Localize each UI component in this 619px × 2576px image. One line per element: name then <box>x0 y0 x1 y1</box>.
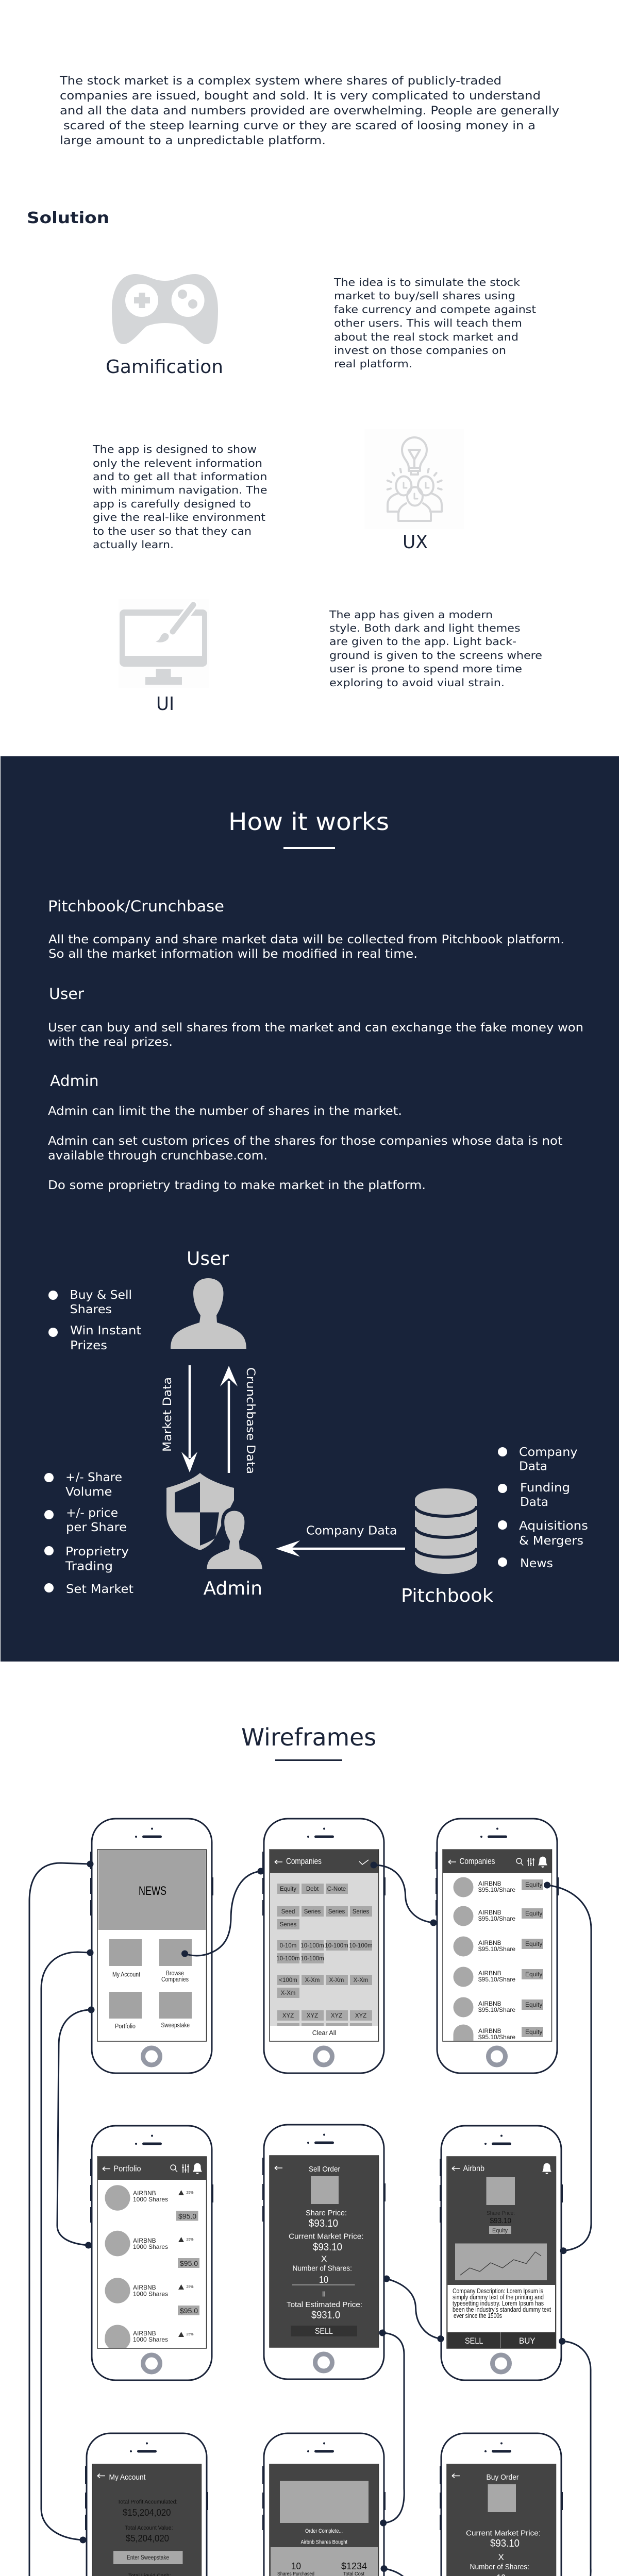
label: UI: UI <box>156 693 174 715</box>
list: pitchbook data: News <box>520 1557 553 1570</box>
list: admin capabilities <box>44 1471 133 1596</box>
text: User: User <box>49 985 84 1003</box>
wireframe: company filters: XYZ <box>331 2013 342 2019</box>
wireframe: company filters: 10-100m <box>325 1943 348 1949</box>
wireframe: home: Browse <box>166 1969 184 1977</box>
text: UX description: actually learn. <box>93 538 174 551</box>
list: admin capabilities: Volume <box>65 1485 112 1499</box>
text: UI description: user is prone to spend more time <box>329 663 522 675</box>
wireframe: companies list: Equity <box>525 1910 542 1917</box>
text: gamification description: market to buy/sell shares using <box>334 290 515 302</box>
panel: how it works <box>1 756 619 1662</box>
wireframe: portfolio: 25% <box>187 2333 194 2336</box>
text: UI description <box>329 608 542 689</box>
wireframe: company filters: X-Xm <box>329 1977 344 1984</box>
wireframe: company filters: X-Xm <box>354 1977 368 1984</box>
text: Admin: Admin can limit the the number of shares in the market. <box>48 1105 402 1118</box>
wireframe: portfolio: $95.0 <box>180 2259 198 2267</box>
wireframe: companies list: AIRBNB <box>478 1970 501 1977</box>
wireframe: companies list: AIRBNB <box>478 1909 501 1916</box>
wireframe: sell order: Share Price: <box>306 2209 347 2217</box>
wireframe: companies list: Equity <box>525 1971 542 1978</box>
wireframe: company filters: <100m <box>279 1977 297 1984</box>
wireframe: buy order: Current Market Price: <box>466 2529 541 2538</box>
wireframe: my account: $15,204,020 <box>123 2507 171 2518</box>
text: Admin: Admin can set custom prices of the shares for those companies whose data is not <box>48 1134 563 1148</box>
wireframe: company detail: typesetting industry. Lorem Ipsum has <box>453 2300 544 2307</box>
label: Crunchbase Data: Crunchbase Data <box>244 1367 257 1474</box>
wireframe: company filters: 10-100m <box>276 1956 300 1962</box>
text: UX description: only the relevent information <box>93 457 262 469</box>
wireframe: company filters: C-Note <box>327 1886 346 1892</box>
wireframe: home: Sweepstake <box>161 2021 190 2029</box>
wireframe: home: My Account <box>112 1970 140 1978</box>
label: UX: UX <box>403 532 428 553</box>
text: gamification description: real platform. <box>334 358 412 370</box>
wireframe: sell order: Current Market Price: <box>289 2232 364 2241</box>
list: admin capabilities: Trading <box>65 1560 113 1573</box>
wireframe: company detail: Share Price: <box>487 2210 515 2216</box>
wireframe: companies list: $95.10/Share <box>478 1915 515 1922</box>
wireframe: company detail: been the industry's standard dummy text <box>453 2306 551 2313</box>
wireframe: portfolio: AIRBNB <box>133 2330 156 2337</box>
wireframe: companies list: $95.10/Share <box>478 2006 515 2013</box>
text: UX description: and to get all that information <box>93 470 267 483</box>
wireframe: company filters: Series <box>328 1909 345 1915</box>
wireframe: company filters: Companies <box>286 1856 322 1866</box>
wireframe: buy order: X <box>498 2552 504 2562</box>
icon: game controller <box>112 274 218 344</box>
wireframe: my account: Enter Sweepstake <box>127 2555 169 2561</box>
text: gamification description: invest on those companies on <box>334 344 506 357</box>
wireframe: company detail: Equity <box>492 2228 508 2234</box>
label: Admin: Admin <box>203 1578 262 1599</box>
wireframe: companies list: AIRBNB <box>478 2027 501 2035</box>
intro paragraph: scared of the steep learning curve or they are scared of loosing money in a <box>63 120 536 132</box>
wireframe: companies list: Equity <box>525 2001 542 2008</box>
wireframe: sell order: Sell Order <box>309 2165 340 2174</box>
intro paragraph <box>59 75 559 147</box>
text: Admin: Do some proprietry trading to make market in the platform. <box>48 1179 426 1192</box>
wireframe: sell order: $93.10 <box>313 2242 342 2253</box>
wireframe: my account: Total Account Value: <box>125 2525 173 2531</box>
text: User: with the real prizes. <box>48 1036 173 1049</box>
wireframe: my account: My Account <box>109 2473 146 2482</box>
list: user capabilities <box>48 1289 141 1352</box>
panel: UX <box>92 429 464 553</box>
panel: gamification <box>106 274 536 378</box>
wireframe: companies list: $95.10/Share <box>478 1945 515 1953</box>
text: Admin <box>48 1072 563 1192</box>
heading: How it works: How it works <box>228 808 389 836</box>
wireframe: companies list: Companies <box>460 1856 495 1866</box>
intro paragraph: The stock market is a complex system where shares of publicly-traded <box>59 75 501 88</box>
wireframe: company detail: SELL <box>465 2336 483 2346</box>
intro paragraph: companies are issued, bought and sold. It is very complicated to understand <box>60 90 541 103</box>
list: pitchbook data: Funding <box>520 1481 570 1495</box>
wireframe: buy order: $93.10 <box>490 2538 520 2549</box>
wireframe: companies list: AIRBNB <box>478 1939 501 1946</box>
wireframe: company filters: X-Xm <box>305 1977 320 1984</box>
text: UI description: exploring to avoid viual strain. <box>329 676 505 689</box>
arrow: crunchbase data up <box>220 1366 238 1473</box>
wireframe: portfolio: 1000 Shares <box>133 2243 168 2250</box>
label: Pitchbook: Pitchbook <box>401 1585 493 1606</box>
text: User <box>48 985 583 1049</box>
wireframe: companies list: $95.10/Share <box>478 1886 515 1893</box>
wireframe: company filters: Equity <box>280 1886 296 1892</box>
list: admin capabilities: Proprietry <box>65 1545 129 1558</box>
wireframe: company filters: Series <box>353 1909 370 1915</box>
text: Pitchbook/Crunchbase: All the company and share market data will be collected from Pitchbook platform. <box>48 933 564 946</box>
arrow: market data down <box>181 1365 197 1472</box>
icon: monitor with brush <box>119 599 209 688</box>
wireframe: order complete: 10 <box>291 2561 301 2571</box>
wireframe: company filters: 10-100m <box>300 1956 324 1962</box>
wireframe: company detail <box>440 2126 563 2380</box>
wireframe: company detail: ever since the 1500s <box>454 2312 502 2319</box>
wireframe: company detail: $93.10 <box>490 2216 511 2225</box>
wireframe: company filters: XYZ <box>355 2013 366 2019</box>
wireframe: company filters: XYZ <box>282 2013 294 2019</box>
text: UX description: to the user so that they can <box>93 525 252 537</box>
wireframe: order complete: Order Complete... <box>305 2528 343 2534</box>
text: gamification description: The idea is to simulate the stock <box>333 276 520 289</box>
wireframe: sell order: 10 <box>319 2275 328 2285</box>
wireframe: home: NEWS <box>139 1884 166 1898</box>
list: pitchbook data <box>498 1446 588 1570</box>
text: User: User can buy and sell shares from the market and can exchange the fake money won <box>48 1021 583 1035</box>
wireframe: buy order: Buy Order <box>487 2473 519 2482</box>
wireframe: buy order: Number of Shares: <box>470 2563 529 2571</box>
list: pitchbook data: & Mergers <box>519 1534 583 1548</box>
wireframe: companies list: $95.10/Share <box>478 2033 515 2041</box>
wireframe: company filters <box>262 1819 386 2073</box>
panel: UI <box>119 599 542 715</box>
list: user capabilities: Shares <box>70 1303 112 1316</box>
list: admin capabilities: per Share <box>66 1521 127 1534</box>
wireframe: home: Portfolio <box>115 2022 136 2030</box>
wireframe: order complete <box>262 2433 386 2576</box>
list: user capabilities: Win Instant <box>70 1324 141 1337</box>
label: Market Data: Market Data <box>161 1377 174 1452</box>
wireframe: home <box>90 1819 213 2073</box>
wireframe: portfolio: 1000 Shares <box>133 2291 168 2298</box>
text: UI description: are given to the app. Light back- <box>329 635 516 648</box>
wireframe: company filters: 10-100m <box>300 1943 324 1949</box>
wireframe: portfolio: 25% <box>187 2191 194 2195</box>
list: user capabilities: Prizes <box>70 1339 107 1352</box>
diagram: data flow <box>44 1248 588 1606</box>
wireframe: sell order: $93.10 <box>309 2218 338 2229</box>
wireframe: portfolio: $95.0 <box>178 2212 196 2221</box>
text: UI description: The app has given a modern <box>329 608 493 621</box>
label: Gamification: Gamification <box>106 357 223 378</box>
wireframe: portfolio: $95.0 <box>180 2307 198 2315</box>
label: User: User <box>187 1248 229 1269</box>
text: UI description: style. Both dark and light themes <box>329 622 521 634</box>
wireframe: portfolio: 1000 Shares <box>133 2196 168 2203</box>
text: Admin: Admin <box>50 1072 99 1090</box>
text: gamification description <box>333 276 536 370</box>
intro paragraph: and all the data and numbers provided are overwhelming. People are generally <box>60 105 559 117</box>
wireframe: company filters: 10-100m <box>349 1943 373 1949</box>
wireframe: portfolio: 1000 Shares <box>133 2336 168 2343</box>
connectors between wireframes <box>29 1861 591 2576</box>
wireframe: portfolio: 25% <box>187 2285 194 2289</box>
wireframe: company filters: Clear All <box>312 2029 336 2037</box>
list: admin capabilities: +/- Share <box>65 1471 122 1484</box>
text: Pitchbook/Crunchbase: Pitchbook/Crunchbase <box>48 897 224 915</box>
wireframe: company filters: Seed <box>281 1909 295 1915</box>
wireframe: company filters: Series <box>280 1922 297 1928</box>
wireframe: sell order: X <box>321 2254 327 2264</box>
wireframe: sell order: Total Estimated Price: <box>287 2300 362 2309</box>
wireframe: company detail: simply dummy text of the printing and <box>453 2294 544 2301</box>
wireframe: my account: $5,204,020 <box>126 2533 169 2544</box>
heading: Solution: Solution <box>27 209 109 227</box>
icon: user bust <box>171 1278 246 1349</box>
text: Pitchbook/Crunchbase <box>48 897 564 961</box>
list: pitchbook data: Aquisitions <box>519 1519 588 1533</box>
text: Admin: available through crunchbase.com. <box>48 1149 267 1162</box>
wireframe: portfolio <box>90 2126 213 2380</box>
icon: admin with shield <box>166 1473 264 1571</box>
wireframe: order complete: Airbnb Shares Bought <box>301 2539 347 2545</box>
wireframe: company filters: X-Xm <box>281 1990 295 1996</box>
list: pitchbook data: Company <box>519 1446 577 1459</box>
label: Company Data: Company Data <box>306 1524 397 1537</box>
text: gamification description: other users. This will teach them <box>334 317 522 329</box>
wireframe: companies list: Equity <box>525 2028 542 2036</box>
text: gamification description: about the real stock market and <box>334 331 518 343</box>
wireframe: company detail: Company Description: Lorem Ipsum is <box>453 2287 543 2295</box>
wireframe: companies list: AIRBNB <box>478 2000 501 2007</box>
wireframe: company filters: Series <box>304 1909 321 1915</box>
wireframe: companies list: AIRBNB <box>478 1880 501 1887</box>
list: pitchbook data: Data <box>519 1460 547 1473</box>
text: Pitchbook/Crunchbase: So all the market information will be modified in real time. <box>48 947 417 961</box>
list: admin capabilities: Set Market <box>66 1583 133 1596</box>
text: UX description: app is carefully designed to <box>93 498 251 510</box>
arrow: company data to admin <box>276 1540 405 1557</box>
wireframe: portfolio: AIRBNB <box>133 2237 156 2244</box>
intro paragraph: large amount to a unpredictable platform. <box>60 134 326 147</box>
text: gamification description: fake currency and compete against <box>334 303 536 315</box>
text: UX description <box>92 443 267 551</box>
wireframe: my account <box>85 2433 208 2576</box>
text: UI description: ground is given to the screens where <box>329 649 542 662</box>
wireframe: companies list: Equity <box>525 1881 542 1888</box>
list: user capabilities: Buy & Sell <box>70 1289 132 1302</box>
wireframe: home: Companies <box>161 1975 189 1983</box>
wireframe: order complete: $1234 <box>341 2561 367 2571</box>
text: UX description: The app is designed to show <box>92 443 257 455</box>
icon: bulb above people <box>364 429 464 529</box>
wireframe: portfolio: 25% <box>187 2238 194 2242</box>
wireframe: my account: Total Profit Accumulated: <box>118 2499 177 2505</box>
text: UX description: with minimum navigation. The <box>93 484 267 496</box>
wireframe: companies list: Equity <box>525 1940 542 1947</box>
list: pitchbook data: Data <box>520 1496 548 1509</box>
wireframe: portfolio: AIRBNB <box>133 2284 156 2291</box>
list: admin capabilities: +/- price <box>66 1506 118 1520</box>
wireframe: companies list: $95.10/Share <box>478 1976 515 1983</box>
wireframe: sell order: Number of Shares: <box>293 2264 352 2273</box>
wireframe: companies list <box>436 1819 559 2073</box>
wireframe: portfolio: AIRBNB <box>133 2190 156 2197</box>
heading: Wireframes: Wireframes <box>241 1723 376 1751</box>
text: UX description: give the real-like environment <box>93 511 265 523</box>
wireframe: sell order <box>262 2125 386 2379</box>
wireframe: sell order: II <box>322 2290 326 2299</box>
wireframe: buy order <box>440 2433 563 2576</box>
wireframe: company detail: BUY <box>519 2336 535 2346</box>
wireframe: sell order: $931.0 <box>311 2310 340 2321</box>
wireframe: company filters: Debt <box>306 1886 319 1892</box>
wireframe: sell order: SELL <box>315 2326 333 2336</box>
wireframe: company filters: XYZ <box>307 2013 318 2019</box>
icon: database <box>415 1488 477 1574</box>
wireframe: company filters: 0-10m <box>280 1943 296 1949</box>
wireframe: portfolio: Portfolio <box>113 2165 141 2173</box>
wireframe: company detail: Airbnb <box>463 2164 484 2173</box>
